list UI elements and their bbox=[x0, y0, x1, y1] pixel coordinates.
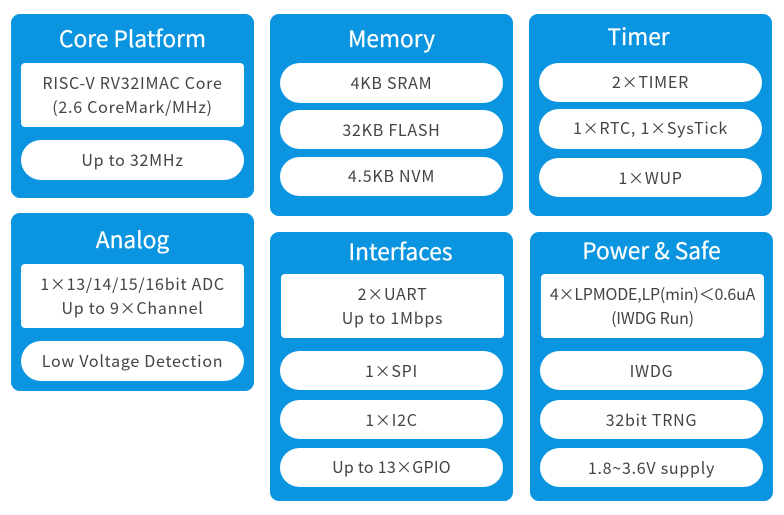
pill: gpio: Up to 13×GPIO bbox=[332, 454, 451, 478]
pill: nvm bbox=[280, 157, 503, 196]
pill: supply bbox=[540, 448, 763, 487]
heading: core platform: Core Platform bbox=[59, 21, 206, 54]
panel: core platform bbox=[11, 14, 254, 198]
pill: rtc and systick bbox=[539, 109, 762, 149]
pill: timer count bbox=[539, 63, 762, 102]
pill: wup bbox=[539, 158, 762, 197]
text box: core: (2.6 CoreMark/MHz) bbox=[52, 94, 213, 118]
pill: sram: 4KB SRAM bbox=[351, 70, 432, 94]
pill: iwdg: IWDG bbox=[630, 358, 673, 382]
pill: i2c: 1×I2C bbox=[365, 406, 418, 430]
text box: adc bbox=[21, 264, 244, 328]
text box: low power modes bbox=[541, 274, 764, 338]
pill: low voltage detection bbox=[21, 341, 244, 381]
pill: wup: 1×WUP bbox=[618, 164, 683, 188]
text box: uart: 2×UART bbox=[358, 280, 427, 304]
text box: uart: Up to 1Mbps bbox=[342, 304, 443, 328]
pill: rtc and systick: 1×RTC, 1×SysTick bbox=[573, 115, 728, 139]
text box: core: RISC-V RV32IMAC Core bbox=[42, 70, 223, 94]
heading: interfaces: Interfaces bbox=[349, 234, 452, 267]
pill: frequency: Up to 32MHz bbox=[81, 147, 184, 171]
pill: flash bbox=[280, 110, 503, 149]
pill: trng bbox=[540, 400, 763, 439]
heading: power and safe: Power & Safe bbox=[582, 233, 721, 266]
text box: uart bbox=[281, 274, 504, 338]
text box: core bbox=[21, 63, 244, 127]
text box: adc: 1×13/14/15/16bit ADC bbox=[40, 270, 225, 294]
pill: spi: 1×SPI bbox=[365, 358, 418, 382]
pill: low voltage detection: Low Voltage Detection bbox=[42, 348, 223, 372]
pill: trng: 32bit TRNG bbox=[606, 406, 697, 430]
panel: memory bbox=[270, 14, 513, 216]
pill: iwdg bbox=[540, 351, 763, 390]
panel: analog bbox=[11, 213, 254, 391]
text box: low power modes: 4×LPMODE,LP(min)＜0.6uA bbox=[550, 280, 755, 304]
panel: interfaces bbox=[270, 232, 513, 501]
pill: flash: 32KB FLASH bbox=[342, 116, 441, 140]
pill: gpio bbox=[280, 448, 503, 487]
heading: timer: Timer bbox=[607, 19, 670, 52]
pill: sram bbox=[280, 63, 503, 103]
pill: spi bbox=[280, 351, 503, 390]
pill: supply: 1.8~3.6V supply bbox=[588, 454, 715, 478]
heading: analog: Analog bbox=[96, 222, 169, 255]
pill: i2c bbox=[280, 400, 503, 439]
text box: adc: Up to 9×Channel bbox=[61, 294, 204, 318]
panel: timer bbox=[529, 14, 772, 216]
pill: frequency bbox=[21, 140, 244, 180]
pill: nvm: 4.5KB NVM bbox=[348, 162, 435, 186]
panel: power and safe bbox=[530, 232, 773, 501]
text box: low power modes: (IWDG Run) bbox=[611, 304, 694, 328]
heading: memory: Memory bbox=[348, 21, 435, 54]
pill: timer count: 2×TIMER bbox=[612, 69, 689, 93]
